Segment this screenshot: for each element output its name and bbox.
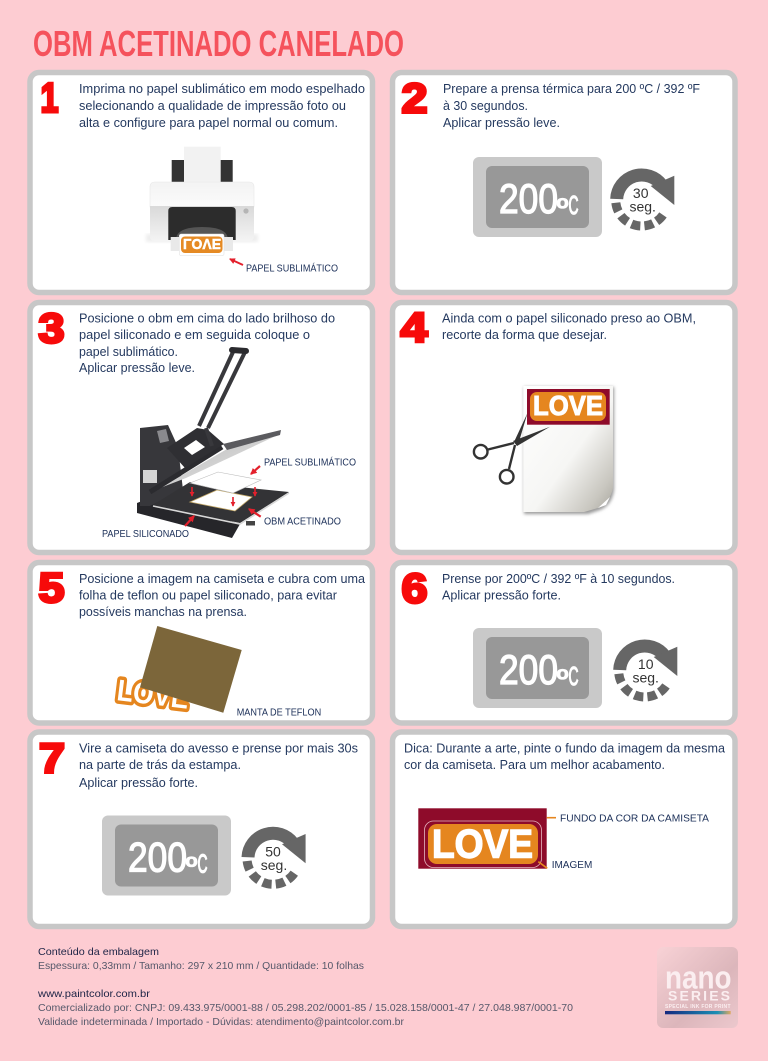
step 3 text: papel sublimático. (79, 344, 178, 359)
label: manta de teflon: MANTA DE TEFLON (237, 708, 321, 719)
icon: timer 50 seconds: 50 (265, 843, 281, 859)
icon: timer 10 seconds (619, 646, 677, 697)
panel: tip (392, 732, 735, 926)
temperature display: C (198, 848, 208, 878)
temperature display: 200 (499, 175, 558, 222)
step 6 text: Aplicar pressão forte. (442, 588, 561, 602)
step 4 text (442, 311, 696, 342)
temperature display: 200 (128, 834, 187, 880)
label: papel siliconado: PAPEL SILICONADO (102, 529, 189, 540)
temperature display: º (557, 665, 568, 693)
temperature display (473, 157, 602, 237)
footer: package contents: Conteúdo da embalagem (38, 946, 159, 958)
step number 5: 5 (38, 564, 64, 611)
step 5 text: Posicione a imagem na camiseta e cubra com uma (79, 571, 366, 586)
step 7 text: na parte de trás da estampa. (79, 757, 241, 772)
icon: timer 30 seconds (616, 175, 674, 226)
step 7 text: Vire a camiseta do avesso e prense por mais 30s (79, 740, 358, 756)
label: papel sublimático: PAPEL SUBLIMÁTICO (264, 456, 356, 468)
icon: timer 10 seconds: seg. (632, 670, 659, 686)
icon: timer 50 seconds (247, 833, 306, 884)
title: OBM ACETINADO CANELADO (33, 23, 404, 64)
label: imagem: IMAGEM (552, 860, 592, 871)
icon: timer 10 seconds: 10 (638, 656, 654, 672)
temperature display (102, 816, 231, 896)
icon: timer 50 seconds: seg. (261, 857, 287, 873)
paper sheet with love print (523, 386, 614, 514)
panel: step 3 (30, 302, 372, 552)
step 1 text: selecionando a qualidade de impressão foto ou (79, 98, 346, 113)
step number 1: 1 (40, 74, 58, 121)
step 4 text: recorte da forma que desejar. (442, 327, 607, 342)
logo: nano series: SERIES (668, 988, 730, 1004)
logo: nano series: SPECIAL INK FOR PRINT (665, 1004, 730, 1010)
panel: step 7 (30, 732, 372, 926)
heat press machine (137, 350, 289, 538)
panel: step 5 (30, 562, 372, 723)
step 2 text (443, 81, 700, 130)
step 4 text: Ainda com o papel siliconado preso ao OBM, (442, 311, 696, 326)
icon: printer with mirrored print: LOVE (183, 235, 221, 252)
step 6 text (442, 571, 675, 602)
orange pointer lines (538, 818, 556, 868)
step 6 text: Prense por 200ºC / 392 ºF à 10 segundos. (442, 571, 675, 586)
step 1 text: Imprima no papel sublimático em modo espelhado (79, 81, 365, 96)
step 1 text (79, 81, 365, 130)
step number 3: 3 (38, 304, 64, 352)
teflon sheet (140, 626, 242, 713)
temperature display: º (186, 852, 197, 880)
label: papel sublimático: PAPEL SUBLIMÁTICO (246, 262, 338, 275)
step 3 text (79, 311, 335, 375)
step 5 text: possíveis manchas na prensa. (79, 604, 247, 619)
tip text: Dica: Durante a arte, pinte o fundo da imagem da mesma (404, 741, 726, 756)
icon: timer 30 seconds: 30 (633, 185, 649, 201)
footer: company info (37, 988, 573, 1028)
panel: step 4 (392, 302, 735, 552)
love artwork on maroon background (418, 808, 547, 869)
temperature display: º (557, 194, 568, 222)
label: obm acetinado: OBM ACETINADO (264, 517, 341, 528)
panel: step 1 (30, 72, 372, 292)
tip text (404, 741, 726, 772)
footer: company info: Validade indeterminada / Importado - Dúvidas: atendimento@paintcolor.com.br (38, 1016, 404, 1028)
footer: company info: Comercializado por: CNPJ: 09.433.975/0001-88 / 05.298.202/0001-85 / 15.028.158/0001-47 / 27.048.987/0001-70 (38, 1002, 573, 1014)
step 2 text: à 30 segundos. (443, 98, 528, 113)
paper sheet with love print: LOVE (533, 390, 603, 421)
step 1 text: alta e configure para papel normal ou comum. (79, 115, 338, 130)
step 3 text: Aplicar pressão leve. (79, 360, 195, 375)
step 2 text: Aplicar pressão leve. (443, 115, 560, 130)
step 3 text: papel siliconado e em seguida coloque o (79, 327, 310, 342)
step number 4: 4 (400, 304, 428, 351)
temperature display: C (568, 190, 578, 220)
temperature display: C (568, 661, 578, 691)
logo: nano series (657, 947, 738, 1028)
footer: package contents: Espessura: 0,33mm / Tamanho: 297 x 210 mm / Quantidade: 10 folhas (38, 960, 364, 972)
footer: package contents (38, 946, 364, 972)
step number 7: 7 (39, 734, 65, 782)
icon: timer 30 seconds: seg. (629, 199, 656, 215)
red arrows: sheets stacking (185, 466, 261, 526)
step number 2: 2 (402, 74, 428, 122)
temperature display (473, 628, 602, 708)
step 5 text: folha de teflon ou papel siliconado, para evitar (79, 588, 338, 602)
step number 6: 6 (402, 564, 428, 612)
step 7 text (79, 740, 358, 790)
love artwork on maroon background: LOVE (432, 823, 533, 867)
step 2 text: Prepare a prensa térmica para 200 ºC / 392 ºF (443, 81, 700, 96)
icon: scissors (474, 413, 550, 484)
tip text: cor da camiseta. Para um melhor acabamento. (404, 757, 665, 772)
panel: step 6 (392, 562, 735, 723)
footer: company info: www.paintcolor.com.br (37, 988, 151, 1000)
logo: nano series: nano (665, 959, 732, 995)
label: fundo da cor da camiseta: FUNDO DA COR DA CAMISETA (560, 813, 709, 824)
step 7 text: Aplicar pressão forte. (79, 775, 198, 790)
panel: step 2 (392, 72, 735, 292)
step 3 text: Posicione o obm em cima do lado brilhoso do (79, 311, 335, 326)
love print under teflon: LOVE (115, 674, 191, 716)
step 5 text (79, 571, 366, 619)
icon: printer with mirrored print (146, 147, 258, 256)
temperature display: 200 (499, 646, 558, 693)
arrow: to sublimation paper (230, 259, 243, 265)
